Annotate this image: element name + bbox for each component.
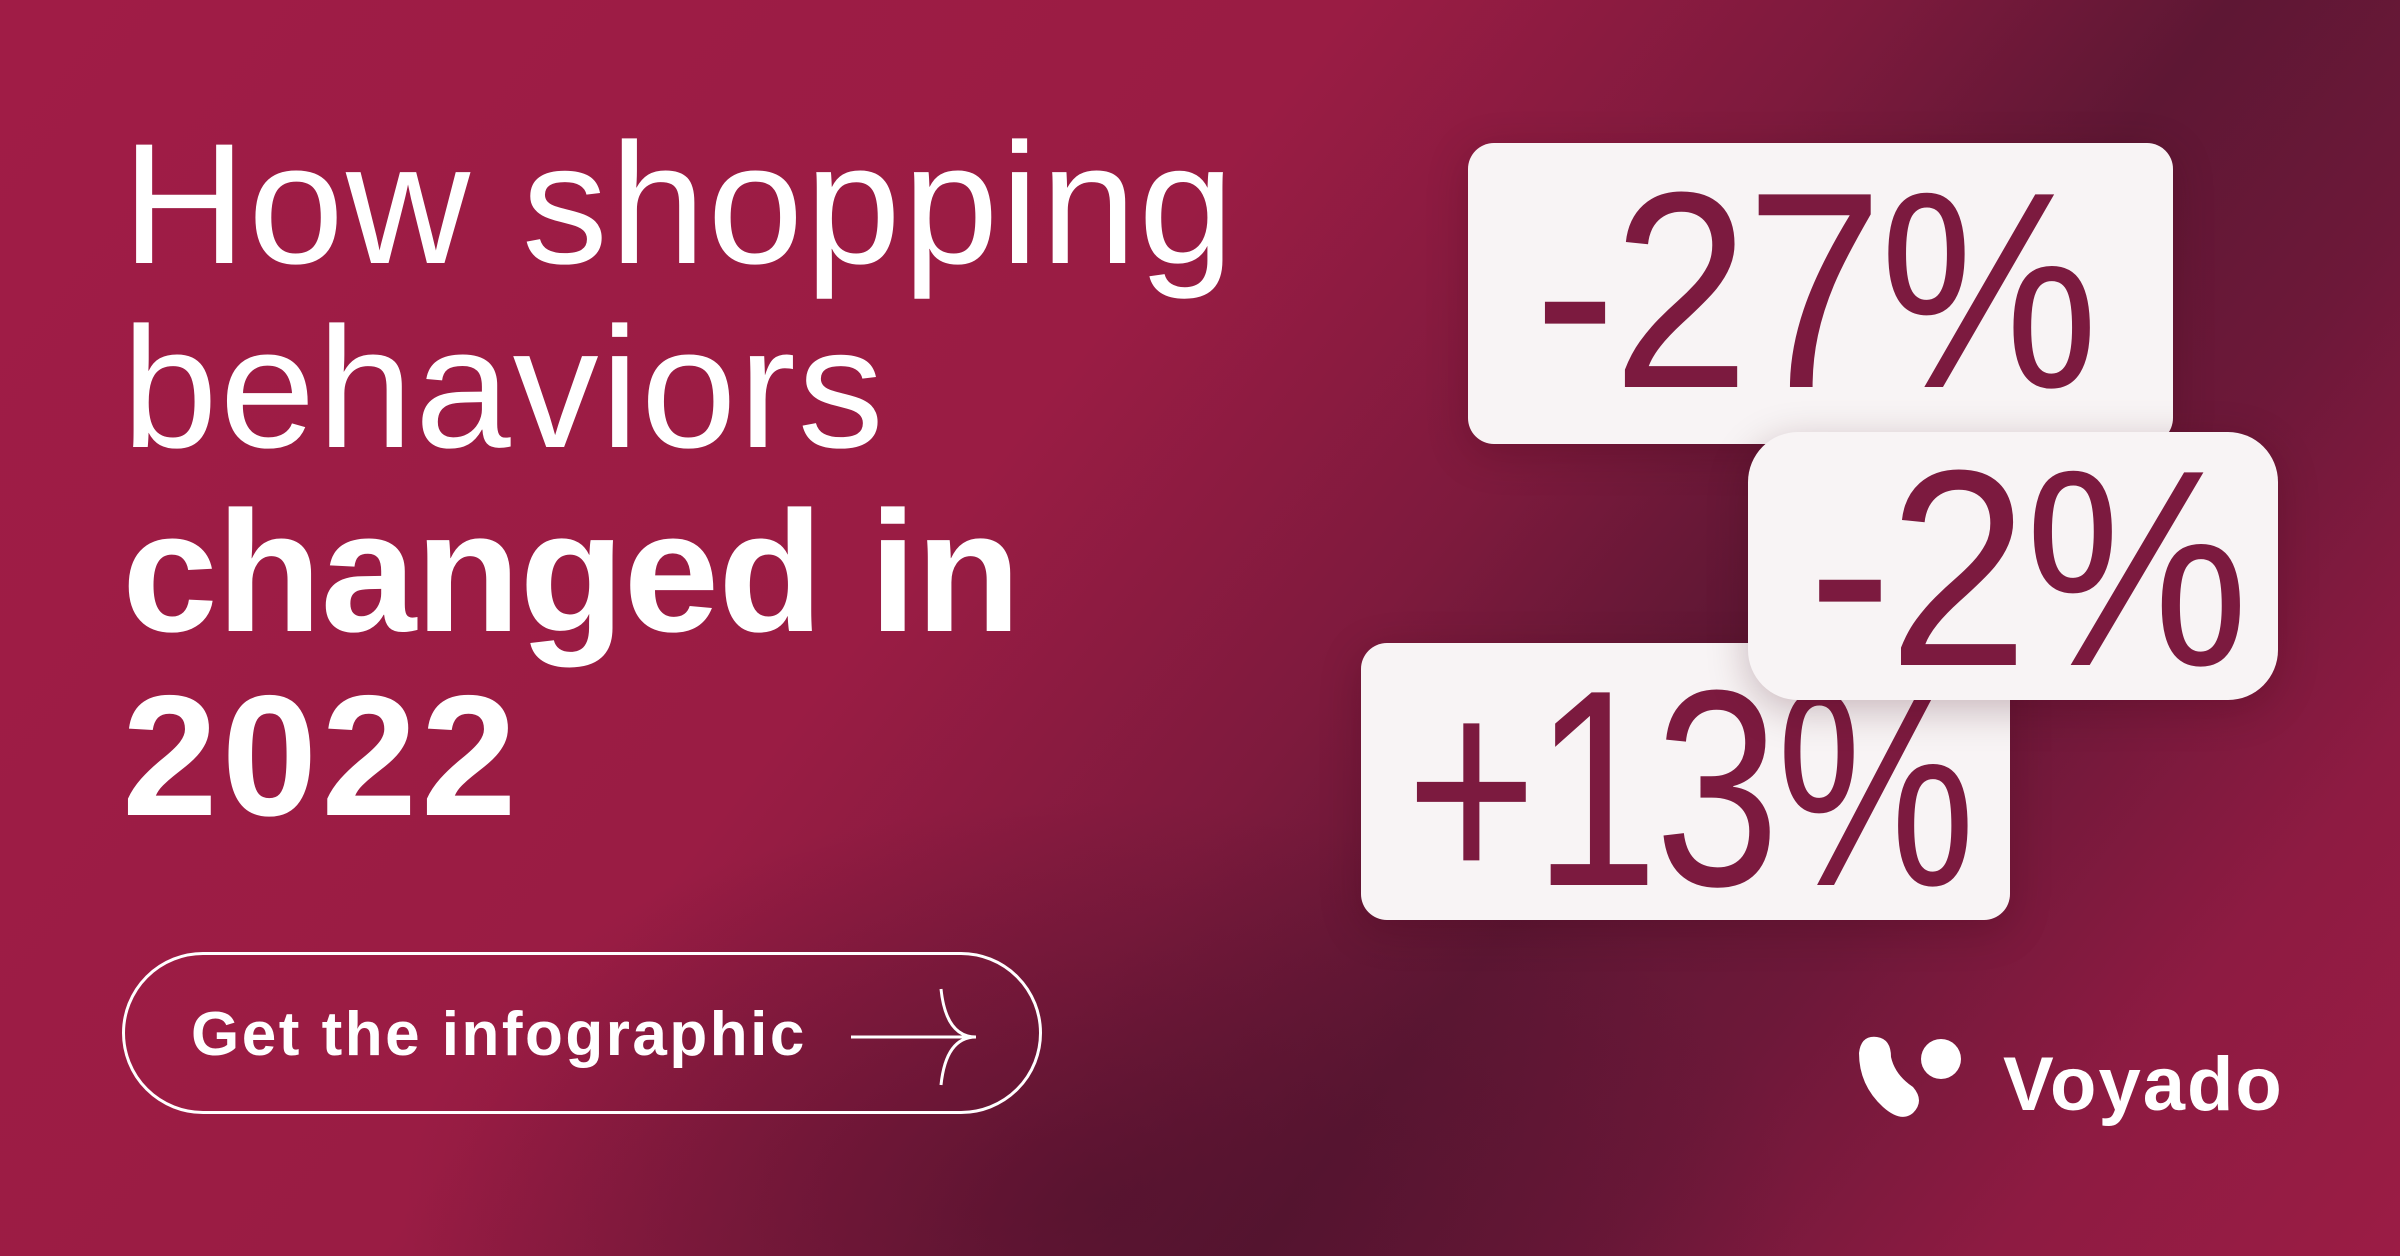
title bbox=[122, 108, 1236, 852]
title: How shopping bbox=[122, 108, 1236, 300]
card: -27%: -27% bbox=[1534, 135, 2095, 447]
logo: Voyado bbox=[1859, 1036, 2284, 1127]
button: get the infographic: Get the infographic bbox=[191, 1000, 807, 1069]
icon: logo mark bbox=[1859, 1036, 1961, 1117]
button: get the infographic bbox=[122, 952, 1042, 1114]
title: changed in bbox=[122, 476, 1020, 668]
icon: arrow bbox=[851, 988, 976, 1086]
card: +13%: +13% bbox=[1406, 633, 1972, 945]
logo: Voyado: Voyado bbox=[2003, 1042, 2284, 1127]
card: -2%: -2% bbox=[1808, 413, 2245, 725]
title: behaviors bbox=[122, 292, 886, 484]
title: 2022 bbox=[122, 660, 521, 852]
